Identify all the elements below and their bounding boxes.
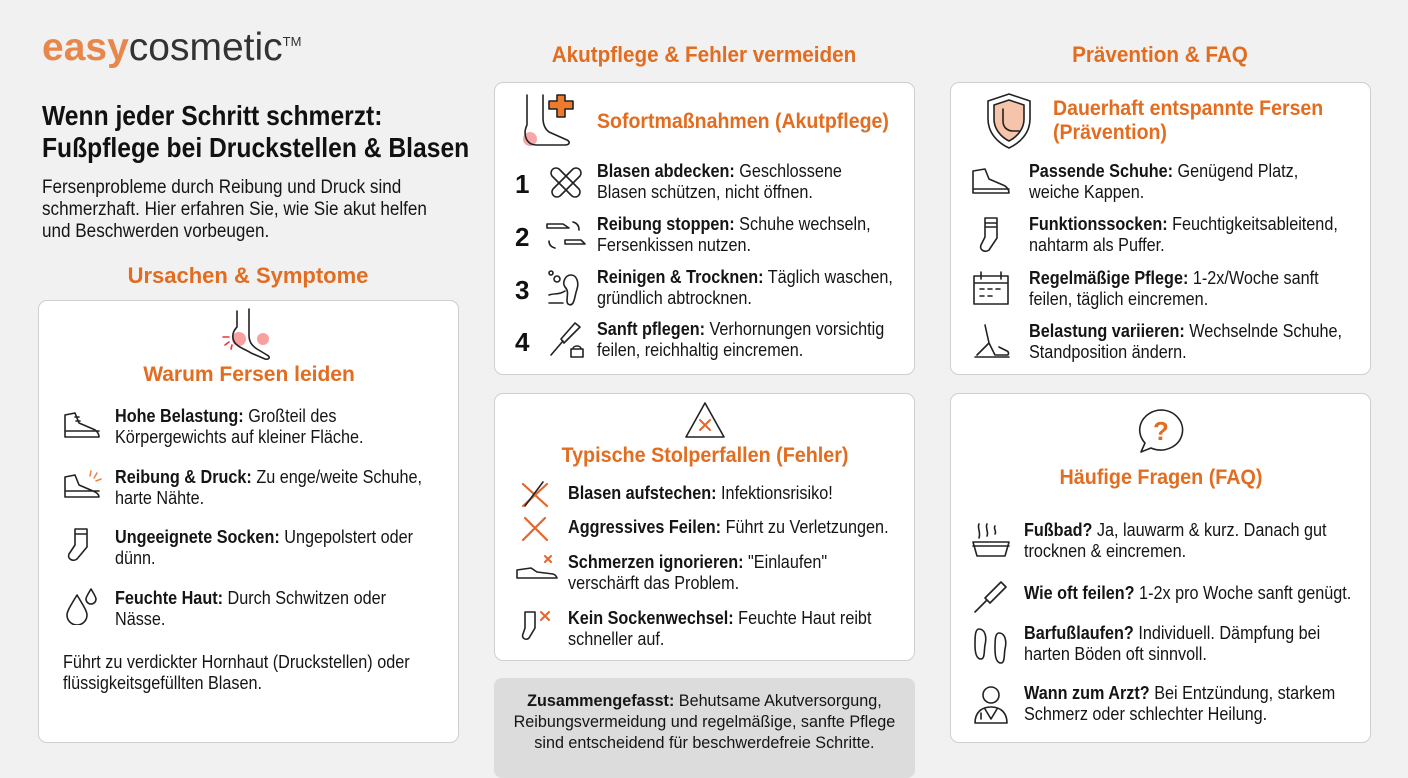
faq: Wie oft feilen: Wie oft feilen? 1-2x pro Woche sanft genügt.: [1024, 583, 1351, 603]
item: Funktionssocken: Funktionssocken: Feuchtigkeitsableitend,: [1029, 214, 1338, 234]
icon: shield: [987, 93, 1031, 149]
step 2: Fersenkissen nutzen.: [597, 235, 751, 255]
text: Feuchte Haut: [115, 588, 386, 629]
title: Fußpflege bei Druckstellen & Blasen: [42, 132, 469, 163]
step 1: Blasen abdecken: Geschlossene: [597, 161, 842, 181]
text: conclusion: Führt zu verdickter Hornhaut (Druckstellen) oder: [63, 652, 410, 672]
step 4: Sanft pflegen: Verhornungen vorsichtig: [597, 319, 884, 339]
heading: Sofortmaßnahmen: Sofortmaßnahmen (Akutpflege): [597, 110, 889, 133]
panel: Prävention: [950, 82, 1371, 375]
text: Hohe Belastung: Hohe Belastung: Großteil des: [115, 406, 336, 426]
faq: Wann zum Arzt: Wann zum Arzt? Bei Entzündung, starkem: [1024, 683, 1335, 703]
step 3: [515, 267, 893, 308]
text: Reibung & Druck: harte Nähte.: [115, 488, 204, 508]
item: Kein Sockenwechsel: schneller auf.: [568, 629, 664, 649]
item: Passende Schuhe: weiche Kappen.: [1029, 182, 1144, 202]
step 3: Reinigen & Trocknen: Täglich waschen,: [597, 267, 893, 287]
heading: Dauerhaft entspannte Fersen: [1053, 97, 1323, 144]
heading: Dauerhaft entspannte Fersen: Dauerhaft entspannte Fersen: [1053, 97, 1323, 120]
step 2: [515, 214, 871, 255]
text: Reibung & Druck: Reibung & Druck: Zu enge/weite Schuhe,: [115, 467, 422, 487]
panel: causes: [38, 300, 459, 743]
item: Regelmäßige Pflege: [973, 268, 1319, 309]
text: Ungeeignete Socken: dünn.: [115, 548, 156, 568]
item: Belastung variieren: [974, 321, 1342, 362]
faq: Fußbad: Fußbad? Ja, lauwarm & kurz. Danach gut: [1024, 520, 1326, 540]
item: Funktionssocken: nahtarm als Puffer.: [1029, 235, 1165, 255]
faq: Barfußlaufen: [974, 623, 1320, 664]
item: Regelmäßige Pflege: feilen, täglich eincremen.: [1029, 289, 1208, 309]
title: Wenn jeder Schritt schmerzt:: [42, 100, 382, 131]
faq: Fußbad: [972, 520, 1326, 561]
item: Schmerzen ignorieren: Schmerzen ignorieren: "Einlaufen": [568, 552, 827, 572]
icon: question bubble: ?: [1153, 416, 1169, 446]
item: Passende Schuhe: Passende Schuhe: Genügend Platz,: [1029, 161, 1298, 181]
summary box: [494, 678, 915, 778]
item: Blasen aufstechen: [522, 481, 833, 508]
item: Blasen aufstechen: Blasen aufstechen: Infektionsrisiko!: [568, 483, 833, 503]
item: Passende Schuhe: [972, 161, 1298, 202]
title: [42, 100, 469, 163]
heading: Dauerhaft entspannte Fersen: (Prävention): [1053, 121, 1167, 144]
item: Belastung variieren: Standposition ändern.: [1029, 342, 1187, 362]
panel: Stolperfallen: [494, 393, 915, 661]
step 1: [515, 161, 842, 202]
text: Hohe Belastung: [115, 406, 364, 447]
item: Kein Sockenwechsel: [522, 608, 872, 649]
step 2: Reibung stoppen: Schuhe wechseln,: [597, 214, 871, 234]
icon: shoe friction: [64, 470, 102, 498]
heading: Warum Fersen leiden: Warum Fersen leiden: [143, 363, 355, 386]
panel: Sofortmaßnahmen: [494, 82, 915, 375]
heading: Prävention & FAQ: Prävention & FAQ: [1072, 42, 1248, 67]
item: Kein Sockenwechsel: Kein Sockenwechsel: Feuchte Haut reibt: [568, 608, 871, 628]
icon: foot with cross: [523, 94, 574, 146]
intro text: schmerzhaft. Hier erfahren Sie, wie Sie akut helfen: [42, 199, 427, 220]
heading: Häufige Fragen: Häufige Fragen (FAQ): [1060, 466, 1262, 489]
heading: Akutpflege & Fehler vermeiden: Akutpflege & Fehler vermeiden: [552, 42, 856, 67]
faq: Wann zum Arzt: [974, 683, 1335, 724]
icon: sock: [68, 528, 88, 562]
text: Reibung & Druck: [115, 467, 422, 508]
text: conclusion: [63, 652, 410, 693]
item: Regelmäßige Pflege: Regelmäßige Pflege: 1-2x/Woche sanft: [1029, 268, 1319, 288]
step 4: [515, 319, 884, 360]
step 3: 3: [515, 275, 529, 305]
faq: Wie oft feilen: [974, 581, 1351, 613]
text: Hohe Belastung: Körpergewichts auf kleiner Fläche.: [115, 427, 364, 447]
panel: FAQ: [950, 393, 1371, 743]
item: Aggressives Feilen: [522, 516, 889, 542]
text: Feuchte Haut: Feuchte Haut: Durch Schwitzen oder: [115, 588, 386, 608]
step 4: feilen, reichhaltig eincremen.: [597, 340, 803, 360]
step 4: 4: [515, 327, 529, 357]
logo: easycosmeticTM: [42, 26, 301, 69]
item: Funktionssocken: [980, 214, 1338, 255]
item: Schmerzen ignorieren: verschärft das Problem.: [568, 573, 739, 593]
icon: warning: [685, 402, 725, 438]
summary box: sind entscheidend für beschwerdefreie Schritte.: [534, 733, 875, 752]
item: Aggressives Feilen: Aggressives Feilen: Führt zu Verletzungen.: [568, 517, 889, 537]
step 1: Blasen schützen, nicht öffnen.: [597, 182, 813, 202]
step 1: 1: [515, 169, 529, 199]
item: Schmerzen ignorieren: [516, 552, 827, 593]
icon: shoe: [64, 412, 100, 438]
faq: Barfußlaufen: Barfußlaufen? Individuell. Dämpfung bei: [1024, 623, 1320, 643]
item: Belastung variieren: Belastung variieren: Wechselnde Schuhe,: [1029, 321, 1342, 341]
text: Ungeeignete Socken: [115, 527, 413, 568]
icon: water drops: [66, 588, 97, 625]
icon: heel pain: [222, 308, 270, 360]
step 3: gründlich abtrocknen.: [597, 288, 752, 308]
heading: Ursachen & Symptome: Ursachen & Symptome: [128, 263, 368, 288]
summary box: Reibungsvermeidung und regelmäßige, sanfte Pflege: [514, 712, 895, 731]
intro text: [42, 177, 427, 242]
text: Ungeeignete Socken: Ungeeignete Socken: Ungepolstert oder: [115, 527, 413, 547]
text: conclusion: flüssigkeitsgefüllten Blasen.: [63, 673, 262, 693]
text: Feuchte Haut: Nässe.: [115, 609, 165, 629]
summary box: Zusammengefasst: Behutsame Akutversorgung,: [527, 691, 882, 710]
intro text: und Beschwerden vorbeugen.: [42, 221, 269, 242]
intro text: Fersenprobleme durch Reibung und Druck sind: [42, 177, 401, 198]
faq: Wann zum Arzt: Schmerz oder schlechter Heilung.: [1024, 704, 1267, 724]
faq: Barfußlaufen: harten Böden oft sinnvoll.: [1024, 644, 1207, 664]
step 2: 2: [515, 222, 529, 252]
faq: Fußbad: trocknen & eincremen.: [1024, 541, 1186, 561]
icon: question bubble: [1138, 409, 1184, 453]
heading: Typische Stolperfallen: Typische Stolperfallen (Fehler): [561, 444, 849, 467]
